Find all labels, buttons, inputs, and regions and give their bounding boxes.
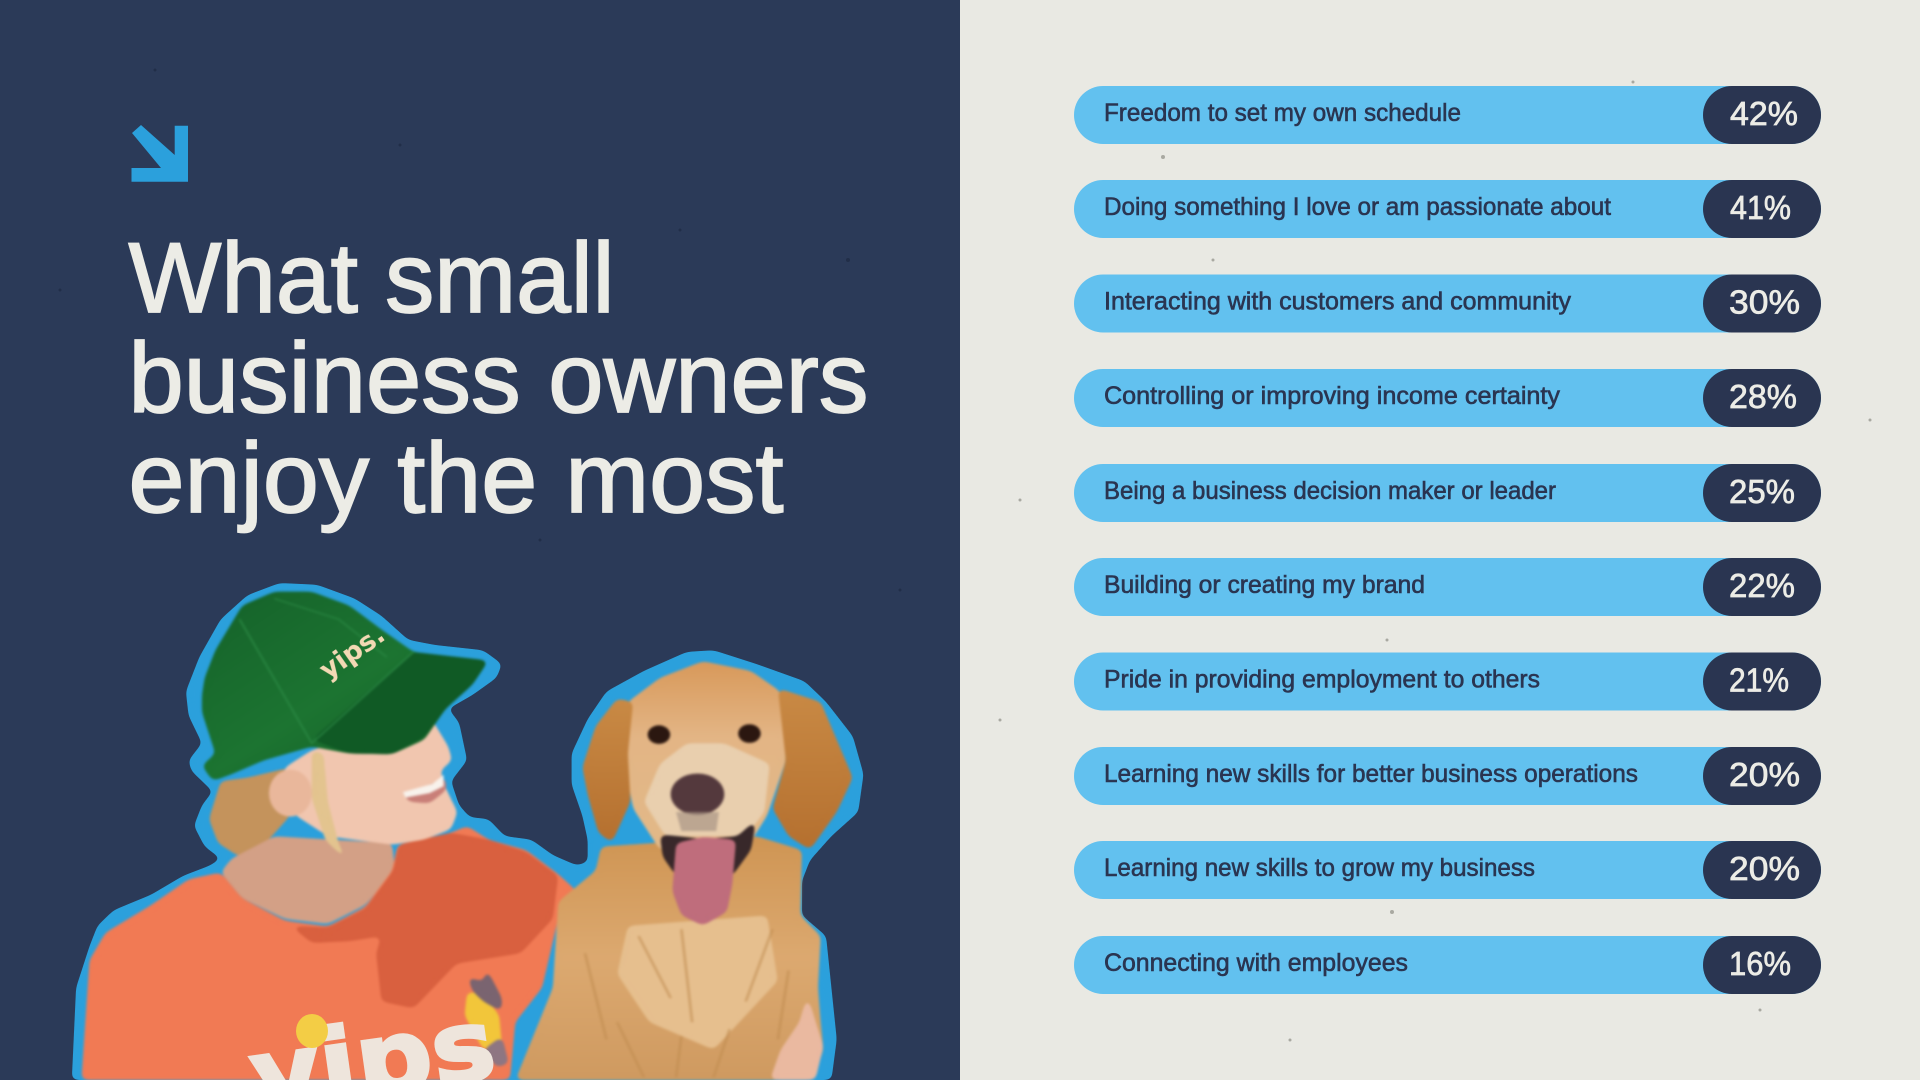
- dog right ear: [772, 688, 853, 850]
- hair bun: [209, 767, 290, 857]
- cap seams: [239, 599, 414, 743]
- bar: Connecting with employees: 16%: [1729, 945, 1791, 982]
- shirt mascot: [464, 991, 502, 1050]
- icon: down-right arrow: [132, 125, 188, 182]
- t-shirt collar and shadow: [290, 833, 558, 1008]
- dog body: [515, 836, 823, 1080]
- dog eye right: [738, 724, 761, 743]
- bar: Freedom to set my own schedule: 42%: [1730, 95, 1798, 132]
- bar: Connecting with employees: Connecting with employees: [1104, 949, 1408, 977]
- bar: Interacting with customers: 30%: [1729, 284, 1800, 320]
- bar: Interacting with customers: [1074, 274, 1821, 332]
- dog head: [622, 661, 786, 850]
- bar: Controlling income certainty: Controlling or improving income certainty: [1104, 382, 1561, 410]
- shirt logo yellow dot: [296, 1014, 328, 1048]
- bar: Learning skills to grow: Learning new skills to grow my business: [1104, 854, 1535, 882]
- bar: Being a decision maker: [1074, 464, 1821, 522]
- bar: Building my brand: 22%: [1729, 567, 1795, 604]
- bar: Controlling income certainty: [1074, 369, 1821, 427]
- bar: Learning skills to grow: 20%: [1729, 850, 1800, 887]
- t-shirt: [81, 826, 577, 1080]
- cap brim: [312, 652, 489, 754]
- bar: Freedom to set my own schedule: [1074, 86, 1821, 144]
- bar: Pride in providing employment: [1074, 652, 1821, 710]
- bar: Being a decision maker: 25%: [1729, 473, 1795, 510]
- title: business owners: [128, 322, 868, 433]
- bar: Doing something I love: [1074, 180, 1821, 238]
- panel: right paper background: [960, 0, 1920, 1080]
- bar: Learning skills for operations: 20%: [1729, 756, 1800, 793]
- panel: left navy background: [0, 0, 960, 1080]
- bar: Pride in providing employment: Pride in providing employment to others: [1104, 666, 1540, 694]
- bar: Freedom to set my own schedule: Freedom to set my own schedule: [1104, 99, 1461, 127]
- title: What small: [128, 222, 614, 333]
- dog tongue: [672, 837, 736, 926]
- bar: Doing something I love: Doing something I love or am passionate about: [1104, 193, 1611, 221]
- dog left ear: [582, 698, 633, 843]
- panel: ranked list of bars: [1074, 86, 1821, 994]
- bar: Building my brand: [1074, 558, 1821, 616]
- bar: Being a decision maker: Being a business decision maker or leader: [1104, 477, 1556, 505]
- bar: Connecting with employees: [1074, 936, 1821, 994]
- title: enjoy the most: [128, 422, 784, 533]
- face: [280, 716, 457, 845]
- bar: Controlling income certainty: 28%: [1729, 378, 1797, 415]
- dog mouth: [660, 819, 756, 876]
- bar: Learning skills to grow: [1074, 841, 1821, 899]
- bar: Building my brand: Building or creating my brand: [1104, 571, 1425, 599]
- dog eye left: [648, 725, 670, 744]
- hair strand: [311, 752, 342, 854]
- dog chest fur highlight: [617, 915, 778, 1050]
- photo: woman in green cap with golden retriever: [72, 583, 864, 1080]
- dog muzzle: [644, 743, 770, 836]
- photo interior: [81, 592, 853, 1080]
- cap crown: [200, 590, 446, 782]
- shirt mascot tail: [484, 1038, 509, 1068]
- bar: Learning skills for operations: [1074, 747, 1821, 805]
- dog nose: [671, 774, 724, 815]
- bar: Doing something I love: 41%: [1730, 189, 1791, 226]
- cap logo text: yips.: [314, 619, 391, 686]
- teeth: [403, 775, 444, 798]
- title: [128, 222, 868, 533]
- dog snout grey: [676, 812, 719, 831]
- woman's hand on dog: [770, 995, 823, 1080]
- shirt mascot head: [468, 973, 504, 1010]
- smile: [406, 778, 448, 804]
- bar: Pride in providing employment: 21%: [1729, 662, 1789, 698]
- dog fur streaks: [584, 928, 790, 1060]
- neck and chest: [221, 836, 395, 924]
- ear: [269, 770, 312, 817]
- bar: Learning skills for operations: Learning new skills for better business operations: [1104, 760, 1638, 788]
- blue cut-out outline: [72, 583, 864, 1080]
- bar: Interacting with customers: Interacting with customers and community: [1104, 288, 1571, 316]
